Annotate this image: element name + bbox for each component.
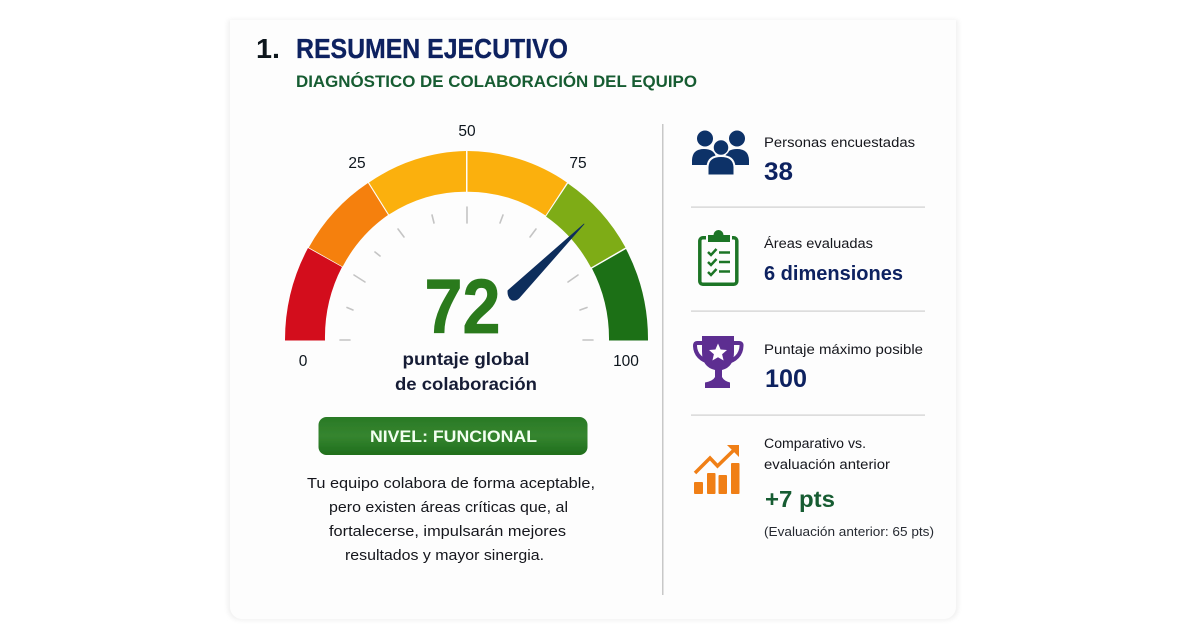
icon: people <box>692 130 749 176</box>
description text: resultados y mayor sinergia. <box>345 548 544 564</box>
label: Comparativo vs. <box>764 436 866 451</box>
gauge scale labels: 50 <box>458 123 476 140</box>
description text <box>307 476 595 564</box>
value: 6 dimensiones <box>764 262 903 285</box>
icon: clipboard <box>700 228 737 284</box>
gauge segment: dark green <box>592 249 648 340</box>
label: Personas encuestadas <box>764 135 915 150</box>
gauge scale labels: 75 <box>569 155 587 172</box>
subtitle: DIAGNÓSTICO DE COLABORACIÓN DEL EQUIPO <box>296 72 697 91</box>
gauge segment: yellow left <box>369 151 466 214</box>
description text: pero existen áreas críticas que, al <box>329 500 568 516</box>
stat: evaluated areas <box>700 228 903 285</box>
value: +7 pts <box>765 486 835 512</box>
gauge scale labels: 25 <box>348 155 366 172</box>
stat: maximum score <box>695 336 923 393</box>
value: 38 <box>764 158 793 186</box>
stat: respondents <box>692 130 915 186</box>
description text: fortalecerse, impulsarán mejores <box>329 524 566 540</box>
score caption: puntaje global <box>402 349 530 369</box>
panel: card <box>228 20 958 620</box>
gauge chart <box>285 123 648 394</box>
section number: 1. <box>256 33 280 64</box>
title: RESUMEN EJECUTIVO <box>296 33 568 64</box>
vertical divider <box>662 124 664 595</box>
gauge segment: orange <box>309 183 388 267</box>
label: Puntaje máximo posible <box>764 342 923 357</box>
note: (Evaluación anterior: 65 pts) <box>764 525 934 539</box>
score caption: de colaboración <box>395 374 537 394</box>
description text: Tu equipo colabora de forma aceptable, <box>307 476 595 492</box>
gauge segment: yellow right <box>468 151 567 216</box>
score value: 72 <box>424 264 500 350</box>
gauge scale labels: 100 <box>613 353 639 370</box>
gauge scale labels <box>299 123 639 370</box>
gauge segment: light green <box>546 184 626 268</box>
gauge scale labels: 0 <box>299 353 308 370</box>
gauge segment: red <box>285 248 342 340</box>
label: Áreas evaluadas <box>764 236 873 251</box>
heading block <box>256 33 697 91</box>
value: 100 <box>765 365 807 393</box>
gauge needle <box>508 224 584 300</box>
stat: comparison <box>694 436 934 539</box>
score caption <box>395 349 537 394</box>
stat: comparison: evaluación anterior <box>764 457 891 472</box>
level badge <box>318 417 588 455</box>
gauge ticks <box>340 207 593 340</box>
icon: trophy <box>695 336 742 388</box>
level badge: NIVEL: FUNCIONAL <box>370 428 537 446</box>
icon: growth chart <box>694 445 740 494</box>
